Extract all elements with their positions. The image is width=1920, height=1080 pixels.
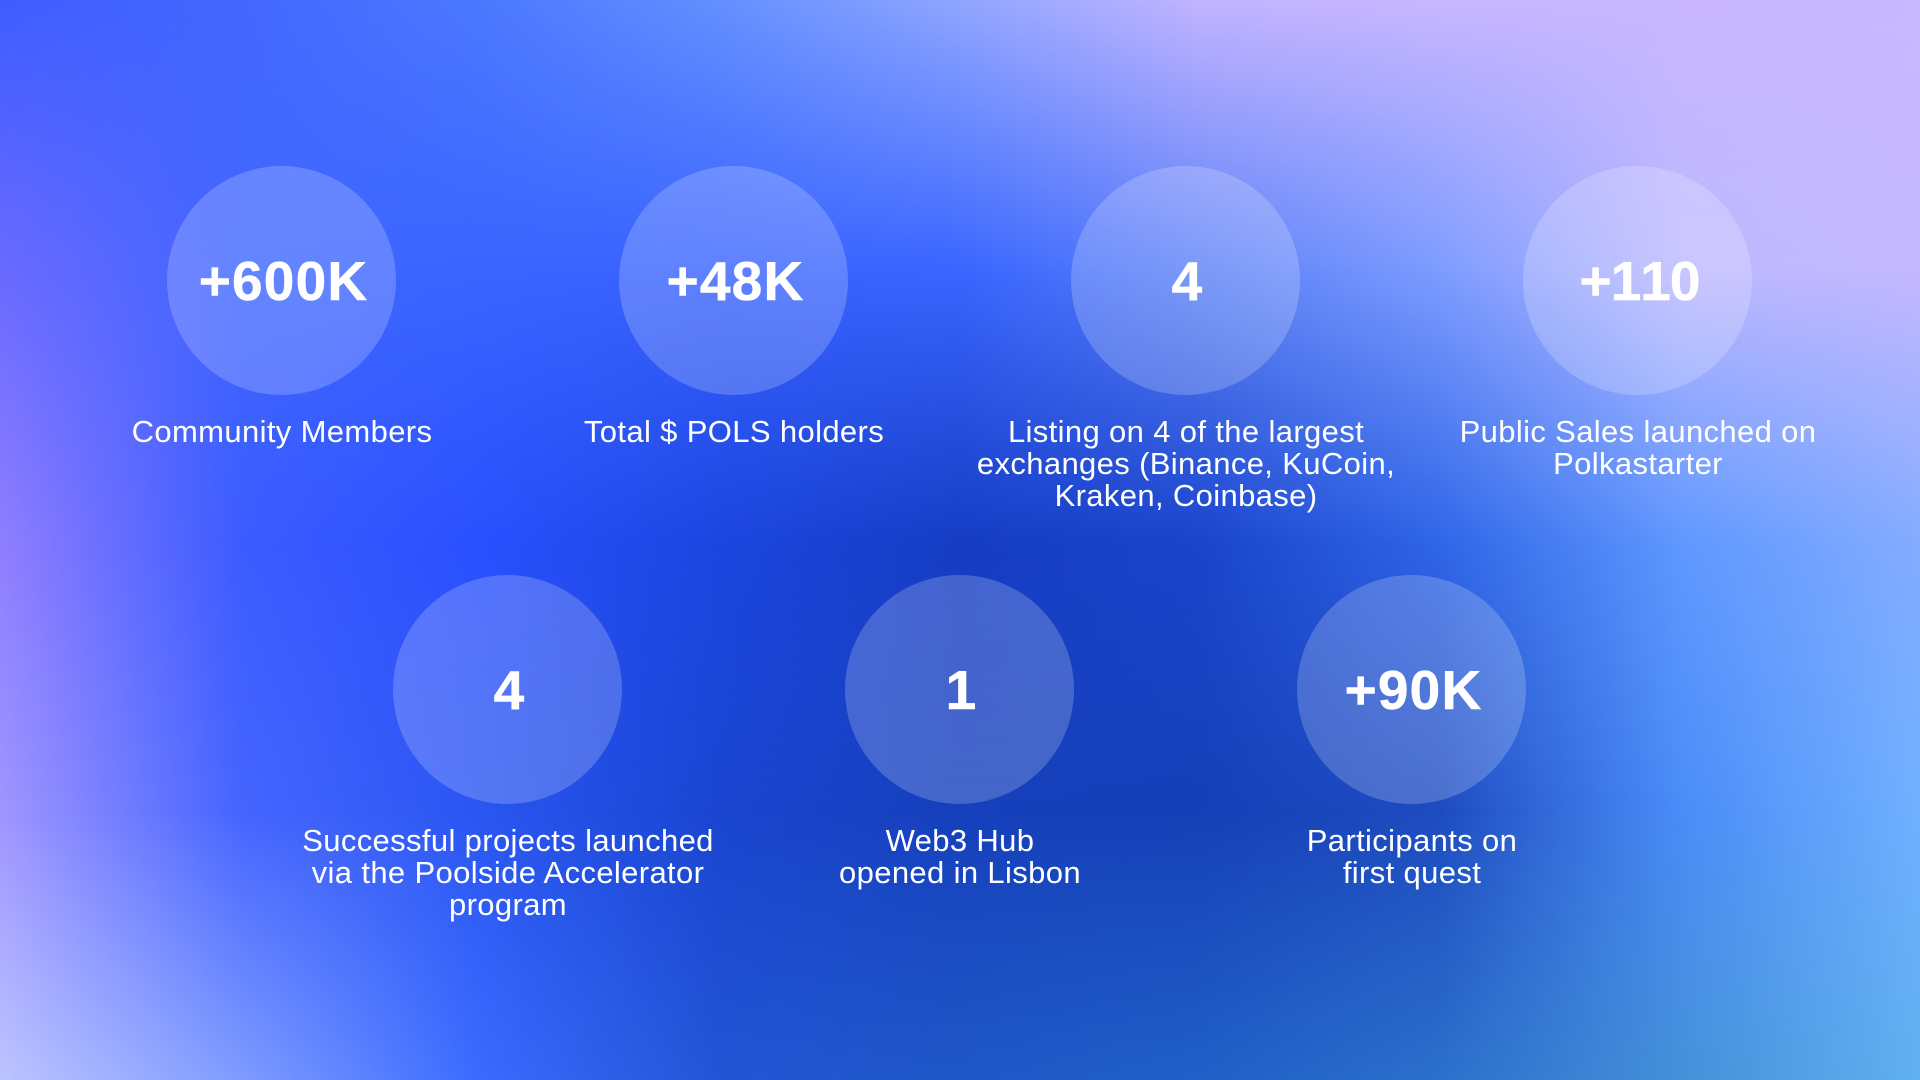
circle with value +90K: +90K xyxy=(1345,659,1482,721)
label: exchange listings xyxy=(977,414,1395,513)
label: web3 hub: Web3 Hub xyxy=(886,823,1034,858)
label: exchange listings: Kraken, Coinbase) xyxy=(1055,478,1317,513)
label: first quest: Participants on xyxy=(1307,823,1517,858)
label: web3 hub xyxy=(839,823,1081,890)
label: public sales xyxy=(1460,414,1816,481)
circle with value +90K xyxy=(1297,575,1526,804)
circle with value 4 xyxy=(1071,166,1300,395)
stat: accelerator projects xyxy=(302,575,714,922)
stat: first quest xyxy=(1297,575,1526,890)
label: first quest xyxy=(1307,823,1517,890)
label: public sales: Public Sales launched on xyxy=(1460,414,1816,449)
label: first quest: first quest xyxy=(1343,855,1481,890)
circle with value 4: 4 xyxy=(494,659,525,721)
circle with value 1: 1 xyxy=(946,659,977,721)
label: POLS holders: Total $ POLS holders xyxy=(584,414,884,449)
label: accelerator projects: program xyxy=(449,887,567,922)
circle with value +48K: +48K xyxy=(667,250,804,312)
label: community members: Community Members xyxy=(132,414,432,449)
label: accelerator projects: Successful projects launched xyxy=(302,823,714,858)
stat: community members xyxy=(132,166,432,449)
stat: POLS holders xyxy=(584,166,884,449)
circle with value +600K xyxy=(167,166,396,395)
label: web3 hub: opened in Lisbon xyxy=(839,855,1081,890)
label: exchange listings: Listing on 4 of the largest xyxy=(1008,414,1364,449)
label: public sales: Polkastarter xyxy=(1553,446,1723,481)
circle with value +110: +110 xyxy=(1580,250,1699,312)
stat: public sales xyxy=(1460,166,1816,481)
circle with value 4 xyxy=(393,575,622,804)
label: accelerator projects xyxy=(302,823,714,922)
circle with value +110 xyxy=(1523,166,1752,395)
circle with value +48K xyxy=(619,166,848,395)
stat: exchange listings xyxy=(977,166,1395,513)
circle with value +600K: +600K xyxy=(199,250,368,312)
circle with value 1 xyxy=(845,575,1074,804)
circle with value 4: 4 xyxy=(1172,250,1203,312)
label: accelerator projects: via the Poolside Accelerator xyxy=(312,855,704,890)
label: exchange listings: exchanges (Binance, KuCoin, xyxy=(977,446,1395,481)
stat: web3 hub xyxy=(839,575,1081,890)
